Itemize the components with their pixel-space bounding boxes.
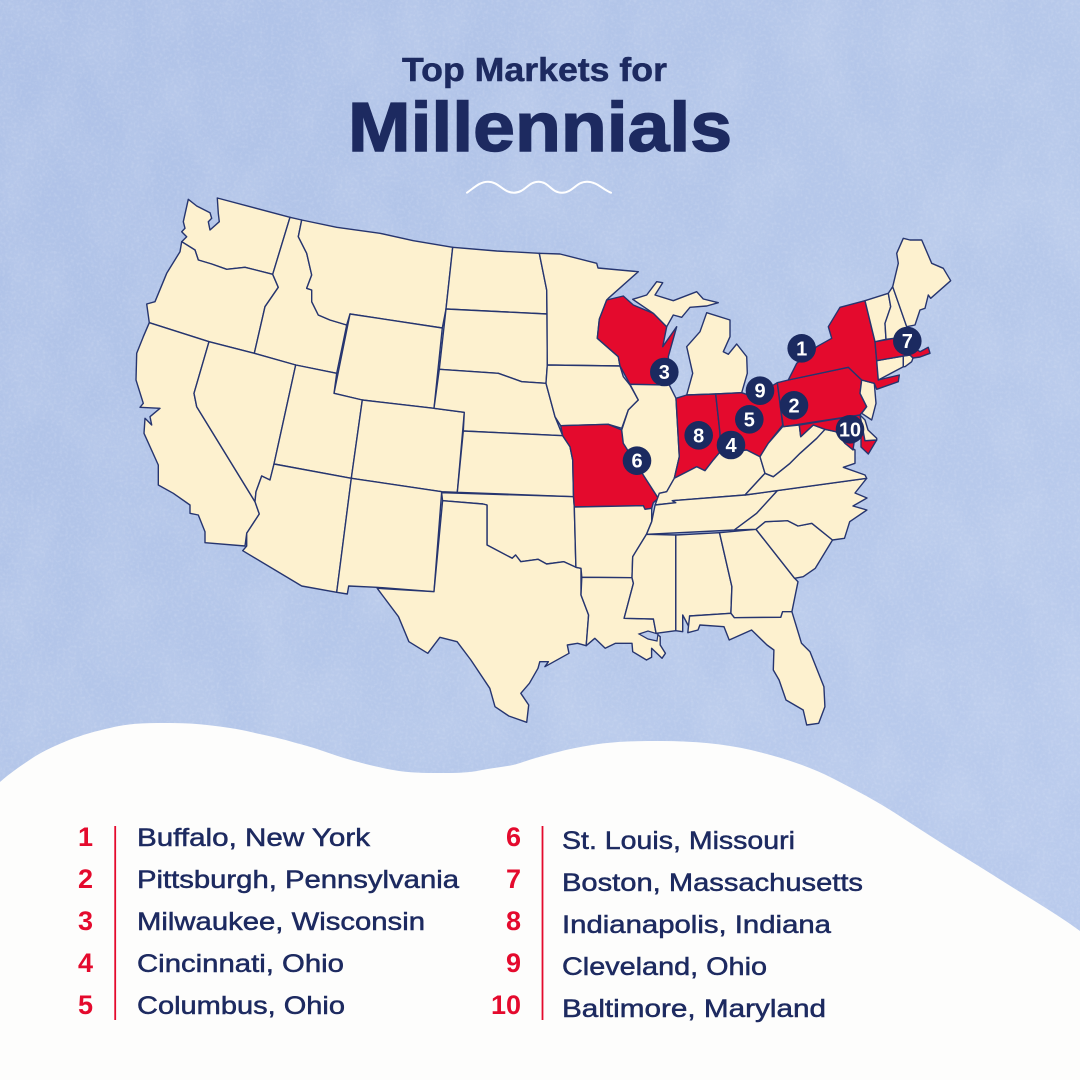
state: Arizona xyxy=(243,464,351,592)
state: New York (highlighted) xyxy=(788,301,899,389)
item 10: 10 xyxy=(491,990,521,1020)
state: Virginia xyxy=(745,429,867,495)
item 1 xyxy=(78,822,371,852)
state: Utah xyxy=(274,365,362,478)
state: South Dakota xyxy=(439,309,547,383)
marker 5 xyxy=(735,405,764,434)
state: Nevada xyxy=(194,342,296,502)
white wavy panel xyxy=(0,723,1080,1080)
state: Pennsylvania (highlighted) xyxy=(777,367,867,427)
item 7: 7 xyxy=(506,864,521,894)
state: Alabama xyxy=(676,533,732,632)
item 9 xyxy=(506,948,767,981)
item 2: 2 xyxy=(78,864,93,894)
marker 10: 10 xyxy=(839,419,861,441)
item 10 xyxy=(491,990,826,1023)
marker 4 xyxy=(717,431,745,459)
item 2 xyxy=(78,864,459,894)
state: Delaware xyxy=(860,415,877,441)
item 10: Baltimore, Maryland xyxy=(562,995,826,1023)
item 1: Buffalo, New York xyxy=(137,824,371,852)
state: Vermont xyxy=(865,293,891,342)
state: Illinois xyxy=(622,384,679,498)
state: Rhode Island xyxy=(903,355,913,367)
item 3: Milwaukee, Wisconsin xyxy=(137,908,425,936)
item 4: Cincinnati, Ohio xyxy=(137,950,344,978)
state: South Carolina xyxy=(756,521,832,578)
state: Colorado xyxy=(351,400,464,492)
marker 4: 4 xyxy=(725,435,737,457)
marker 2: 2 xyxy=(788,395,800,417)
state: Tennessee xyxy=(646,491,777,534)
marker 3: 3 xyxy=(659,362,670,384)
state: California xyxy=(136,323,259,546)
item 2: Pittsburgh, Pennsylvania xyxy=(137,866,459,894)
state: Massachusetts (highlighted) xyxy=(875,337,930,361)
state: Kansas xyxy=(457,431,574,497)
item 9: Cleveland, Ohio xyxy=(562,953,767,981)
state: Ohio (highlighted) xyxy=(716,383,783,457)
state: Indiana (highlighted) xyxy=(674,394,720,478)
item 8: 8 xyxy=(506,906,521,936)
state: Washington xyxy=(182,198,290,274)
state: Michigan upper peninsula xyxy=(633,282,718,327)
state: Oregon xyxy=(147,242,278,353)
title: Millennials xyxy=(348,88,732,166)
state: West Virginia xyxy=(760,425,825,477)
item 6: 6 xyxy=(506,822,521,852)
item 9: 9 xyxy=(506,948,521,978)
state: Connecticut xyxy=(877,356,903,380)
state: Montana xyxy=(298,220,453,328)
state: Florida xyxy=(688,612,825,725)
state: Texas xyxy=(377,501,589,722)
decorative wave under title xyxy=(467,182,611,193)
item 7 xyxy=(506,864,863,897)
state: Mississippi xyxy=(624,534,676,633)
state: Kentucky xyxy=(655,450,765,505)
divider left xyxy=(114,826,116,1020)
lake pontchartrain xyxy=(639,631,658,641)
state: Missouri (highlighted) xyxy=(561,424,658,509)
state: Iowa xyxy=(546,365,638,428)
item 6: St. Louis, Missouri xyxy=(562,827,795,855)
state: Nebraska xyxy=(434,369,563,436)
item 8 xyxy=(506,906,831,939)
ranked list: left column xyxy=(78,822,459,1020)
item 1: 1 xyxy=(78,822,93,852)
state: New Hampshire xyxy=(885,287,907,339)
title xyxy=(348,51,732,166)
item 7: Boston, Massachusetts xyxy=(562,869,863,897)
title: Top Markets for xyxy=(402,51,667,88)
marker 3 xyxy=(650,358,679,386)
state: Idaho xyxy=(254,217,347,373)
item 4 xyxy=(78,948,344,978)
marker 7 xyxy=(893,327,922,355)
marker 6: 6 xyxy=(631,451,643,473)
state: Georgia xyxy=(720,529,798,618)
state: New Jersey xyxy=(860,380,876,420)
item 4: 4 xyxy=(78,948,93,978)
item 3: 3 xyxy=(78,906,93,936)
item 5: 5 xyxy=(78,990,93,1020)
state: Minnesota xyxy=(539,253,638,366)
marker 8: 8 xyxy=(693,425,704,447)
divider right xyxy=(542,826,543,1020)
marker 2 xyxy=(780,391,808,420)
item 3 xyxy=(78,906,425,936)
state: Maine xyxy=(893,238,951,327)
map number markers xyxy=(623,327,922,475)
state: North Carolina xyxy=(734,478,867,540)
marker 10 xyxy=(836,415,864,444)
state: Arkansas xyxy=(574,506,652,578)
state: Wyoming xyxy=(334,314,442,408)
marker 7: 7 xyxy=(902,331,913,353)
marker 9 xyxy=(746,376,774,405)
marker 6 xyxy=(623,446,651,475)
state: Louisiana xyxy=(581,577,665,660)
state: Oklahoma xyxy=(442,493,576,567)
marker 1 xyxy=(787,334,816,363)
item 5 xyxy=(78,990,345,1020)
state: North Dakota xyxy=(446,247,547,314)
state: Maryland (highlighted) xyxy=(799,415,877,454)
item 5: Columbus, Ohio xyxy=(137,992,345,1020)
state: Wisconsin (highlighted) xyxy=(597,296,677,385)
marker 8 xyxy=(684,421,713,450)
state: New Mexico xyxy=(337,478,442,594)
marker 1: 1 xyxy=(796,338,807,360)
ranked list: right column xyxy=(491,822,863,1023)
state: Michigan lower peninsula xyxy=(687,313,747,395)
item 6 xyxy=(506,822,795,855)
marker 5: 5 xyxy=(744,409,755,431)
item 8: Indianapolis, Indiana xyxy=(562,911,831,939)
marker 9: 9 xyxy=(754,381,766,403)
map of the United States xyxy=(136,198,951,725)
